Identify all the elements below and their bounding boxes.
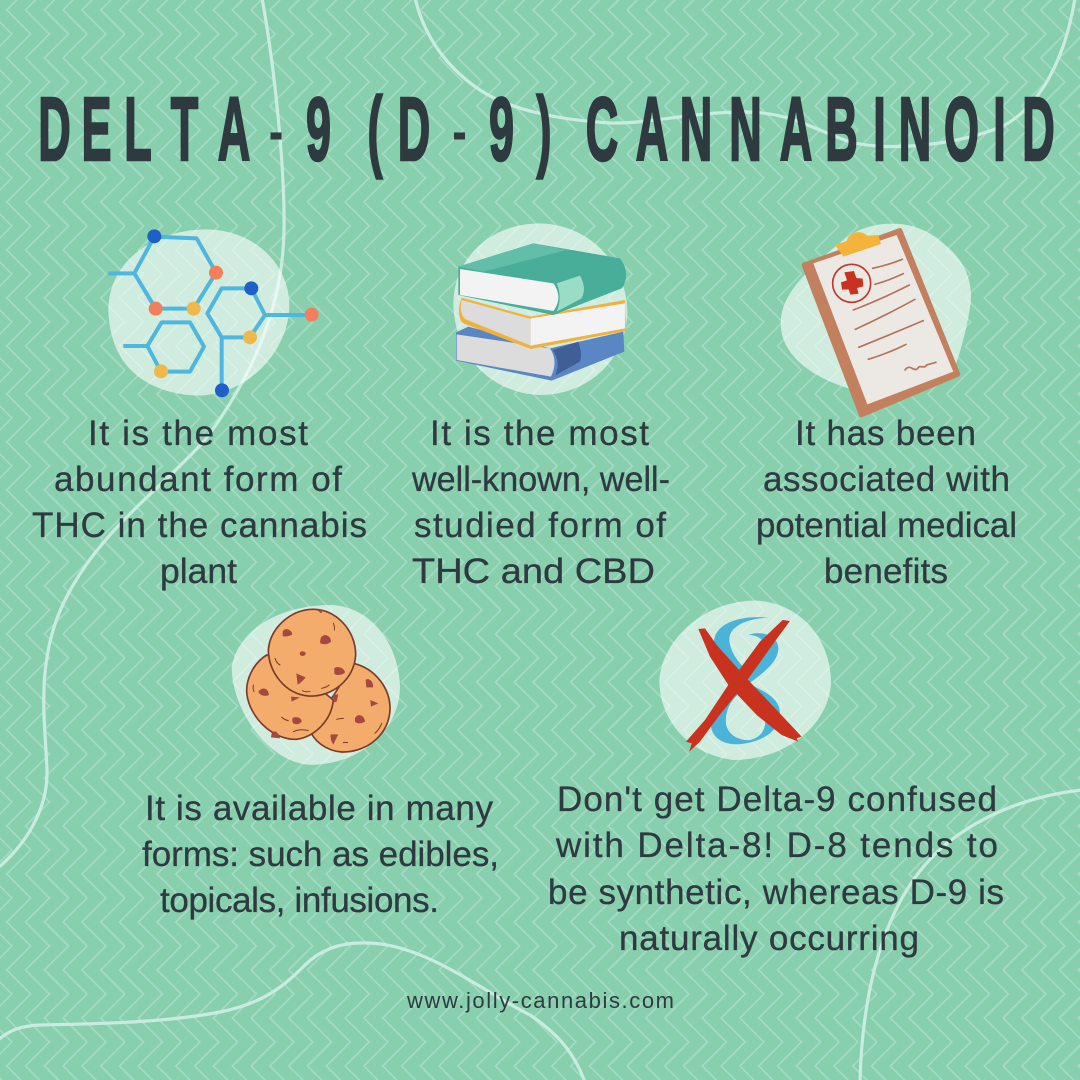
panel: available forms [142,605,499,920]
panel: delta-8 warning [548,601,1004,958]
icon: crossed-out 8 [659,601,831,760]
icon: molecule [108,229,319,397]
text: medical benefits: associated with [763,460,1010,499]
text: available forms: topicals, infusions. [160,881,439,920]
text: medical benefits: It has been [795,414,976,453]
icon: cookies [232,605,400,765]
icon: books [453,223,627,395]
text: available forms: It is available in many [145,789,494,828]
text: well-studied [411,414,670,591]
panel: well-studied [411,223,670,591]
text: delta-8 warning [548,780,1004,958]
panel: abundant form [32,229,367,591]
text: well-studied: It is the most [430,414,649,453]
text: delta-8 warning: Don't get Delta-9 confused [557,780,997,819]
text: well-studied: THC and CBD [412,552,655,591]
text: medical benefits [756,414,1017,591]
text: delta-8 warning: naturally occurring [619,919,919,958]
text: delta-8 warning: be synthetic, whereas D-9 is [548,873,1004,912]
text: abundant form: plant [160,552,237,591]
text: available forms [142,789,499,920]
text: abundant form: It is the most [88,414,308,453]
text: medical benefits: potential medical [756,506,1017,545]
footer url: www.jolly-cannabis.com [406,988,674,1013]
icon: clipboard [781,224,971,415]
text: delta-8 warning: with Delta-8! D-8 tends to [555,826,998,865]
text: available forms: forms: such as edibles, [142,835,499,874]
text: abundant form: THC in the cannabis [32,506,367,545]
text: abundant form [32,414,367,591]
panel: medical benefits [756,224,1017,591]
text: well-studied: well-known, well- [411,460,670,499]
text: abundant form: abundant form of [54,460,342,499]
title: DELTA-9 (D-9) CANNABINOID [38,80,1055,180]
text: medical benefits: benefits [824,552,948,591]
text: well-studied: studied form of [414,506,666,545]
